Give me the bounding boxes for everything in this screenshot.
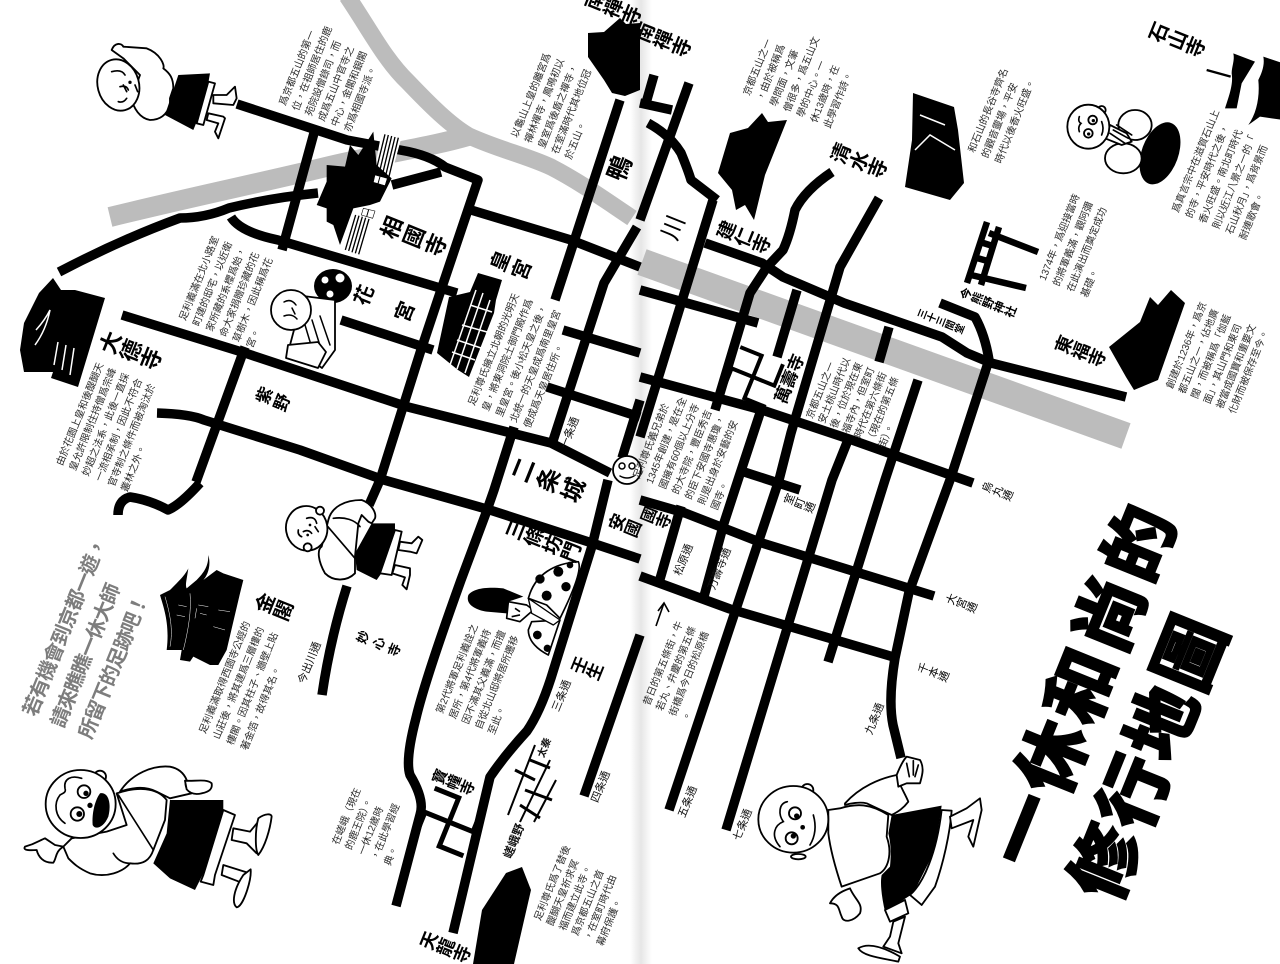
text: Ishiyama-dera: 則以近江八景之一的「	[1209, 133, 1259, 231]
icon: cartoon monk at gutter	[613, 456, 641, 484]
text: Imperial Palace: 里皇宮。後小松天皇之後，	[493, 303, 550, 419]
text: Ankoku-ji: 足利尊氏義兄弟於	[630, 401, 672, 480]
label: Sanjo-bomon: 三條坊門	[501, 517, 584, 568]
text: Kennin-ji: 此學習作詩。	[821, 70, 855, 130]
text: Nanzen-ji: 禪林禪寺，鳳鳴初以	[521, 57, 567, 145]
text: Kennin-ji: 休13歲時，在	[807, 63, 842, 125]
text: Manju-ji: 後，位於現在東	[827, 360, 865, 430]
street network: left page	[59, 100, 640, 933]
text: Ishiyama-dera: 耐連歌會。	[1236, 190, 1267, 242]
text: Ankoku-ji: 1345年創建，是在全	[643, 395, 690, 486]
text: Ishiyama-dera: 石山秋月」，爲背景而	[1223, 143, 1270, 236]
text: Ankoku-ji: 國擁有60個以上分寺	[656, 402, 702, 491]
icon: Kinkaku temple	[160, 555, 243, 665]
text: Ishiyama-dera: 的寺，平安時代之後，	[1182, 122, 1232, 220]
text: Manju-ji: 街）。	[875, 422, 897, 450]
text: Nanzen-ji: 皇室爲後盾之禪寺，	[535, 62, 581, 150]
label: Kennin-ji: 建仁寺	[712, 218, 774, 259]
text: Imakumano shrine: 1374年，爲迎接當時	[1036, 192, 1083, 282]
text: Daitoku-ji: 皇允許限制住持僧爲宗峰	[66, 366, 119, 473]
text: Kiyomizu-dera: 時代以後香火旺盛。	[992, 77, 1038, 165]
text: Kennin-ji: 學問面，文筆	[767, 48, 801, 108]
text: Tofuku-ji: 被當成國寶和重要文	[1213, 322, 1259, 411]
text: Sanjo-bomon: 至此。	[485, 704, 508, 736]
text: Manju-ji: 安土桃山時代以	[815, 356, 853, 425]
label: Omiya street: 大宮通	[942, 591, 979, 616]
label: Gojo street: 五条通	[674, 784, 700, 820]
text: Nanzen-ji: 於五山。	[562, 119, 589, 161]
label: Kamo: 鴨	[601, 152, 636, 188]
text: Manju-ji: 福寺內，但室町	[839, 365, 877, 435]
callout: invitation text: 所留下的足跡吧！	[74, 592, 153, 742]
text: Hodo-ji: ，在此學習經	[368, 802, 402, 862]
text: Tenryu-ji: 福而建立此寺。	[556, 863, 594, 933]
text: Hana-no-gosho: 草樹木，因此稱爲花	[230, 256, 276, 344]
text: Tofuku-ji: 闊，而被稱爲「伽藍	[1188, 312, 1234, 401]
label: river: 川	[655, 212, 688, 247]
text: Sanjo-bomon: 居所，第4代將軍義持	[446, 627, 494, 721]
label: Myoshin-ji: 妙心寺	[353, 628, 406, 662]
text: Imakumano shrine: 基礎。	[1078, 267, 1101, 299]
text: Hodo-ji: 一休12歲時	[355, 805, 386, 857]
text: Daitoku-ji: 由於花園上皇和後醍醐天	[53, 361, 106, 467]
icon: seated monk, top right	[1067, 105, 1188, 190]
icon: torii gate of Imakumano shrine	[967, 222, 1038, 288]
icon: court lady in patterned robe	[468, 562, 579, 655]
text: Imperial Palace: 便成爲天皇居住所。	[521, 342, 566, 430]
label: Shichijo street: 七条通	[729, 807, 755, 843]
text: Kiyomizu-dera: 和石山的長谷寺齊名	[965, 66, 1011, 154]
label: Tofuku-ji: 東福寺	[1051, 333, 1109, 371]
text: Ishiyama-dera: 爲真言宗中在滋賀石山上	[1169, 108, 1222, 214]
text: Tenryu-ji: 足利尊氏爲了替後	[531, 843, 573, 922]
text: Gojo bridge note: 若丸、弁慶的第五條	[653, 624, 699, 713]
text: Hana-no-gosho: 宮。	[243, 326, 263, 350]
text: Ankoku-ji: 國寺。	[709, 480, 731, 512]
label: Murasakino: 紫野	[252, 385, 294, 417]
label: Kinkaku: 金閣	[249, 590, 296, 627]
label: Nanzen-ji: 南禪寺	[630, 19, 694, 63]
text: Imperial Palace: 皇，將東洞院土御門殿作爲	[479, 297, 536, 413]
text: Hana-no-gosho: 命大家捐贈珍藏的花	[216, 250, 262, 339]
callout: invitation text: 若有機會到京都一遊，	[18, 534, 111, 719]
text: Kinkaku: 足利義滿取得西園寺公經的	[196, 619, 253, 735]
text: Ankoku-ji: 的臣下安國寺惠瓊，	[682, 413, 728, 501]
icon: Nanzen-ji temple	[588, 18, 640, 96]
label: Karasuma street: 烏丸通	[978, 479, 1015, 504]
text: Daitoku-ji: 一流相承制，因此不符合	[92, 376, 145, 483]
text: Sanjo-bomon: 自從北山邸將居所遷移	[472, 634, 521, 731]
text: Tofuku-ji: 面」，其山門和東司	[1201, 322, 1244, 406]
text: Sokoku-ji: 中心，金閣和銀閣	[328, 49, 370, 128]
icon: big monk waving, lower right	[758, 757, 982, 962]
text: Sokoku-ji: 位，在祖師居住的鹿	[289, 24, 335, 113]
text: Nanzen-ji: 以龜山上皇的離宮爲	[508, 51, 554, 139]
text: Imperial Palace: 北統一的天皇成爲南里皇宮	[507, 308, 564, 424]
icon: big monk pointing, lower left	[24, 766, 272, 907]
icon: monk thinking, top left	[92, 44, 237, 138]
text: Manju-ji: 京都五山之一	[803, 360, 838, 420]
icon: bamboo at Sagano	[508, 745, 556, 822]
label: Kujo street: 九条通	[861, 701, 887, 737]
icon: Tofuku-ji temple	[1109, 290, 1185, 390]
text: Tenryu-ji: 醍醐天皇祈求冥	[543, 858, 582, 927]
label: Ankoku-ji right fragment: 國寺	[637, 504, 674, 534]
label: Manjuji street: 万壽寺通	[704, 546, 734, 592]
label: Ishiyama-dera: 石山寺	[1144, 20, 1208, 63]
label: Hodo-ji: 寶幢寺	[428, 766, 477, 799]
label: Senbon street: 千本通	[915, 661, 951, 685]
icon: Sokoku-ji temple	[317, 132, 402, 257]
text: Manju-ji: （現在的第五條	[863, 375, 902, 445]
icon: Ishiyama-dera pagoda	[1207, 53, 1280, 125]
icon: Imperial Palace	[437, 273, 502, 377]
icon: Kennin-ji temple	[718, 113, 787, 220]
text: Hodo-ji: 的鹿王院）。	[342, 796, 375, 852]
text: Tofuku-ji: 化財而被保存至今。	[1226, 327, 1271, 416]
text: Gojo bridge note: 街橋爲今日的松原橋	[666, 630, 712, 718]
text: Kinkaku: 樓閣。因其柱子、牆壁上貼	[224, 631, 281, 747]
text: Sokoku-ji: 苑院設僧錄司，而	[302, 39, 344, 118]
label: Uzumasa: 太秦	[534, 736, 554, 759]
label: Sokoku-ji: 相國寺	[376, 213, 452, 263]
label: Kiyomizu-dera: 清水寺	[826, 140, 890, 184]
text: Kinkaku: 山莊後，將其建爲三層樓的	[210, 625, 267, 741]
text: Gojo bridge note: 。	[681, 710, 695, 723]
text: Daitoku-ji: 叢林之外。	[118, 442, 149, 494]
label: Imperial Palace: 皇宮	[485, 248, 537, 287]
icon: manji mark at Hodo-ji	[415, 788, 483, 856]
text: Ishiyama-dera: 香火旺盛。南北町時代	[1196, 128, 1245, 225]
label: Manju-ji: 萬壽寺	[772, 352, 808, 406]
text: Ankoku-ji: 則是出身於安藝的安	[695, 418, 741, 507]
text: Tenryu-ji: ，在室町時代由	[581, 873, 619, 943]
label: Ichijo street: 一条通	[556, 415, 582, 451]
text: Hodo-ji: 在嵯峨（現在	[329, 786, 364, 846]
label: Imakumano shrine: 今熊野神社	[956, 285, 1018, 321]
text: Daitoku-ji: 妙超之法系，此後一直採	[79, 371, 132, 478]
river: Kamo river	[110, 0, 1126, 436]
text: Hodo-ji: 典。	[381, 844, 400, 867]
icon: Tenryu-ji temple	[473, 867, 531, 964]
label: Sanjo street: 三条通	[548, 678, 574, 714]
label: Hana-no-gosho: 花宮	[349, 282, 439, 337]
callout: invitation text: 請來瞧瞧一休大師	[47, 580, 125, 731]
label: Sanjusangen-do: 三十三間堂	[915, 308, 966, 337]
icon: monk with arms crossed, centre	[282, 500, 422, 589]
title: 一休和尚的	[975, 491, 1193, 878]
text: Imperial Palace: 足利尊氏擁立北朝的光明天	[465, 291, 522, 407]
label: Muromachi street: 室町通	[780, 491, 817, 516]
label: Imadegawa street: 今出川通	[294, 640, 324, 686]
label: Matsubara street: 松原通	[670, 542, 696, 578]
text: Tenryu-ji: 爲京都五山之首	[569, 868, 607, 938]
label: Daitoku-ji: 大德寺	[95, 328, 166, 376]
text: Hana-no-gosho: 家所藏的系櫻爲始，	[203, 245, 249, 333]
label: Shijo street: 四条通	[587, 769, 613, 805]
label: Nijo castle: 二条城	[505, 454, 591, 511]
text: Sokoku-ji: 成爲五山中官寺之	[315, 44, 357, 123]
text: Imakumano shrine: 的將軍義滿，觀阿彌	[1050, 200, 1096, 288]
text: Sanjo-bomon: 因不滿其父義滿，而擅	[459, 628, 508, 726]
text: Tenryu-ji: 幕府保護。	[594, 896, 624, 948]
text: Tofuku-ji: 創建於1236年，爲京	[1163, 300, 1210, 390]
text: Nanzen-ji: 在室滿時代其地位冠	[548, 67, 594, 156]
text: Kennin-ji: 學的中心。一	[794, 59, 828, 119]
text: Imakumano shrine: 在此演出而奠定成功	[1064, 205, 1110, 294]
title: 修行地圖	[1057, 603, 1243, 911]
street network: right page	[640, 75, 1126, 830]
text: Tofuku-ji: 都五山之一，佔地廣	[1175, 307, 1221, 395]
text: Sokoku-ji: 亦爲相國寺派。	[341, 64, 379, 134]
text: Sanjo-bomon: 第2代將軍足利義詮之	[433, 622, 481, 715]
text: Daitoku-ji: 官寺制之條件而被淘汰於	[105, 382, 158, 488]
text: Manju-ji: 時代在第六條街	[851, 370, 889, 440]
label: Sagano: 嵯峨野	[500, 821, 527, 860]
label: Mibu: 壬生	[567, 654, 606, 685]
text: Hana-no-gosho: 町建的邸宅，以近衛	[189, 240, 235, 328]
arrow: Gojo bridge pointer	[656, 603, 669, 626]
text: Kiyomizu-dera: 的觀音靈場，平安	[978, 81, 1020, 160]
icon: monk with tree at Hana-no-gosho	[271, 269, 352, 368]
text: Kennin-ji: 京都五山之一	[740, 37, 775, 97]
label: Ankoku-ji left fragment: 安國	[604, 511, 643, 542]
icon: Daitoku-ji temple	[20, 278, 105, 387]
icon: manji mark at Manju-ji	[723, 347, 783, 407]
icon: Kiyomizu-dera building	[905, 93, 964, 200]
text: Gojo bridge note: 昔日的第五條街，牛	[640, 619, 686, 707]
text: Kennin-ji: ，由於被稱爲	[753, 42, 788, 103]
text: Ankoku-ji: 的大寺院，豐臣秀吉	[669, 408, 715, 496]
text: Hana-no-gosho: 足利義滿在北小路室	[176, 234, 222, 322]
text: Kennin-ji: 僧很多，爲五山文	[780, 35, 822, 114]
text: Sokoku-ji: 爲京都五山的第一	[276, 28, 318, 107]
text: Kinkaku: 著金箔，故得其名。	[238, 664, 283, 752]
